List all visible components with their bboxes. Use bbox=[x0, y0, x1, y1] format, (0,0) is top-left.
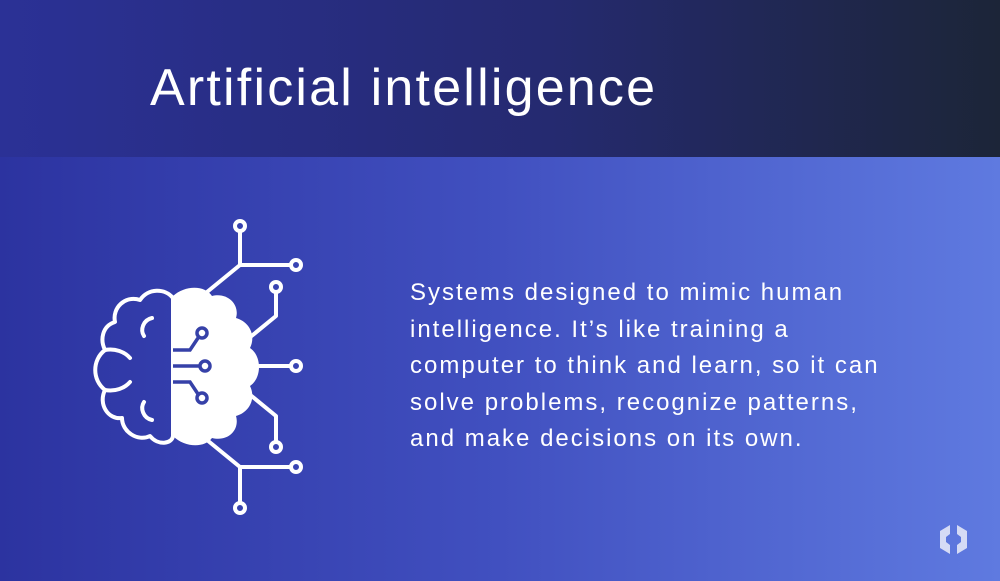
left brain outline bbox=[95, 291, 173, 443]
title: Artificial intelligence bbox=[150, 59, 657, 117]
logo bbox=[940, 525, 967, 554]
description text: and make decisions on its own. bbox=[410, 425, 804, 452]
circuit lines bbox=[207, 231, 291, 292]
description text bbox=[410, 279, 880, 452]
header band bbox=[0, 0, 1000, 157]
description text: intelligence. It’s like training a bbox=[410, 316, 790, 342]
right brain filled bbox=[173, 288, 259, 445]
description text: computer to think and learn, so it can bbox=[410, 352, 880, 379]
description text: Systems designed to mimic human bbox=[410, 279, 844, 306]
description text: solve problems, recognize patterns, bbox=[410, 388, 859, 416]
